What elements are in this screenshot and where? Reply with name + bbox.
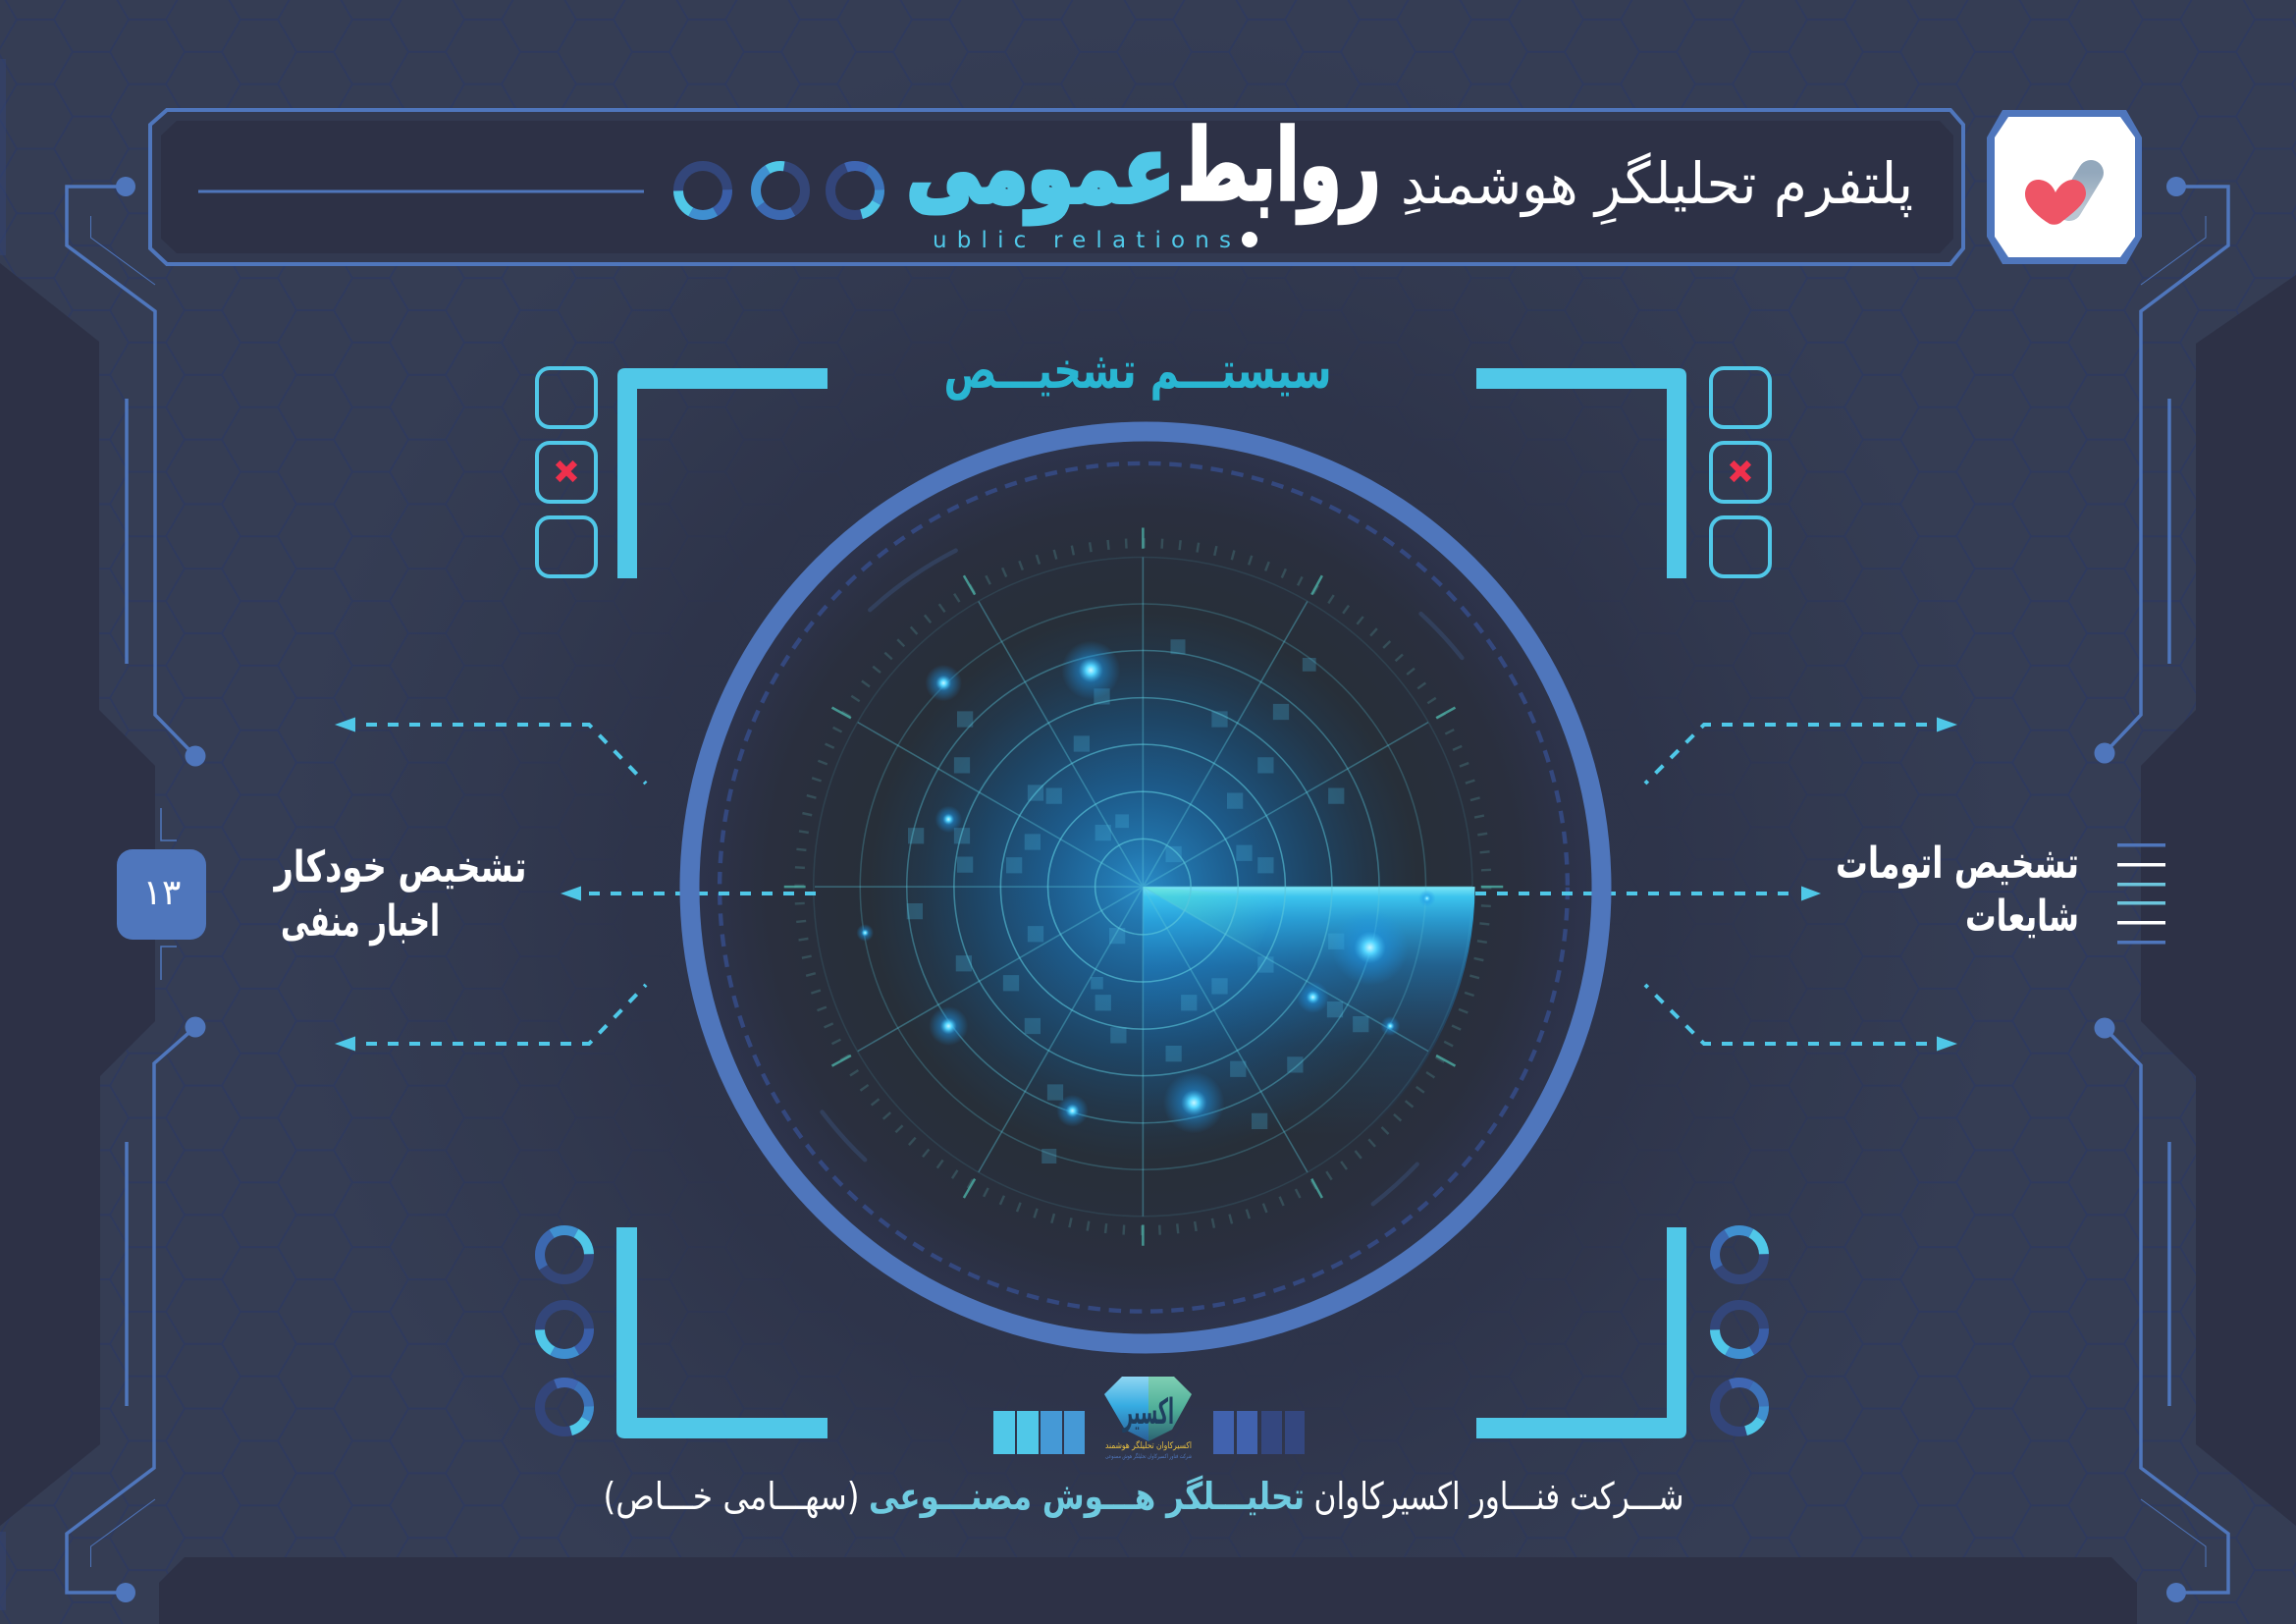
page number badge <box>117 808 206 980</box>
left label: automatic negative news detection <box>273 842 526 947</box>
radar short ticks <box>799 543 1486 1230</box>
dashed arrow: upper right <box>1645 717 1957 784</box>
left label: automatic negative news detection: تشخیص خودکار <box>273 842 526 893</box>
banner rings <box>678 166 880 215</box>
radar outer arcs <box>823 551 1462 1204</box>
progress bars left of logo <box>993 1411 1085 1454</box>
radar range rings <box>814 558 1472 1217</box>
circuit lines: bottom left <box>67 1017 206 1602</box>
right label stripes <box>2117 843 2165 945</box>
dashed arrow: upper left <box>335 717 646 784</box>
logo dot <box>1242 232 1257 247</box>
rings: bottom left <box>540 1230 589 1432</box>
dashed arrow: lower right <box>1645 985 1957 1051</box>
logo word: relations: روابط <box>1178 108 1380 224</box>
logo word: public: عمومی <box>907 118 1174 224</box>
page number badge: ۱۳ <box>143 873 181 913</box>
company logo gem: شرکت فناور اکسیرکاوان تحلیلگر هوش مصنوعی <box>1105 1452 1192 1460</box>
dashed arrow: middle right <box>1475 886 1821 901</box>
dashed arrow: lower left <box>335 985 646 1051</box>
radar long ticks <box>784 528 1503 1246</box>
progress bars right of logo <box>1213 1411 1305 1454</box>
left label: automatic negative news detection: اخبار منفی <box>281 896 440 947</box>
right label: automatic rumor detection: تشخیص اتومات <box>1836 839 2079 889</box>
logo subtitle: ublic relations <box>933 228 1231 253</box>
banner rule <box>198 190 644 192</box>
company logo gem: اکسیرکاوان تحلیلگر هوشمند <box>1105 1439 1192 1451</box>
banner inner panel <box>161 121 1953 253</box>
banner title: پلتفرم تحلیلگرِ هوشمندِ <box>1401 150 1913 225</box>
radar glow spots <box>856 640 1435 1133</box>
section heading: سیستـــم تشخیـــص <box>944 342 1331 401</box>
checkboxes: left <box>537 368 596 576</box>
dashed arrow: middle left <box>561 886 818 901</box>
company logo gem <box>1104 1377 1192 1460</box>
footer company name <box>603 1475 1684 1519</box>
radar dashed ring <box>720 463 1568 1312</box>
circuit lines: top right <box>2095 177 2228 764</box>
company logo gem: اکسیر <box>1122 1392 1174 1433</box>
radar sweep <box>1143 887 1474 1218</box>
footer company name: شـــرکت فنـــاور اکسیرکاوان <box>1313 1475 1684 1519</box>
bracket: bottom right <box>1476 1227 1686 1438</box>
right label: automatic rumor detection: شایعات <box>1965 892 2079 942</box>
footer company name: تحلیـــلگر هـــوش مصنـــوعی <box>869 1475 1305 1518</box>
bracket: top left <box>617 368 828 578</box>
banner frame <box>150 110 1963 264</box>
radar display <box>700 444 1586 1329</box>
radar sweep streak <box>1143 887 1281 952</box>
rings: bottom right <box>1715 1230 1764 1432</box>
radar disc <box>700 444 1586 1329</box>
right label: automatic rumor detection <box>1836 839 2079 942</box>
radar outer ring <box>689 432 1602 1343</box>
header banner <box>150 108 1963 264</box>
icon: heart and check badge <box>1987 110 2142 264</box>
circuit lines: top left <box>67 177 206 766</box>
bracket: top right <box>1476 368 1686 578</box>
circuit lines: bottom right <box>2095 1017 2228 1602</box>
radar spokes <box>815 558 1472 1217</box>
radar data squares <box>907 639 1368 1164</box>
footer company name: (سهـــامی خـــاص) <box>603 1475 860 1519</box>
bracket: bottom left <box>616 1227 828 1438</box>
checkboxes: right <box>1711 368 1770 576</box>
